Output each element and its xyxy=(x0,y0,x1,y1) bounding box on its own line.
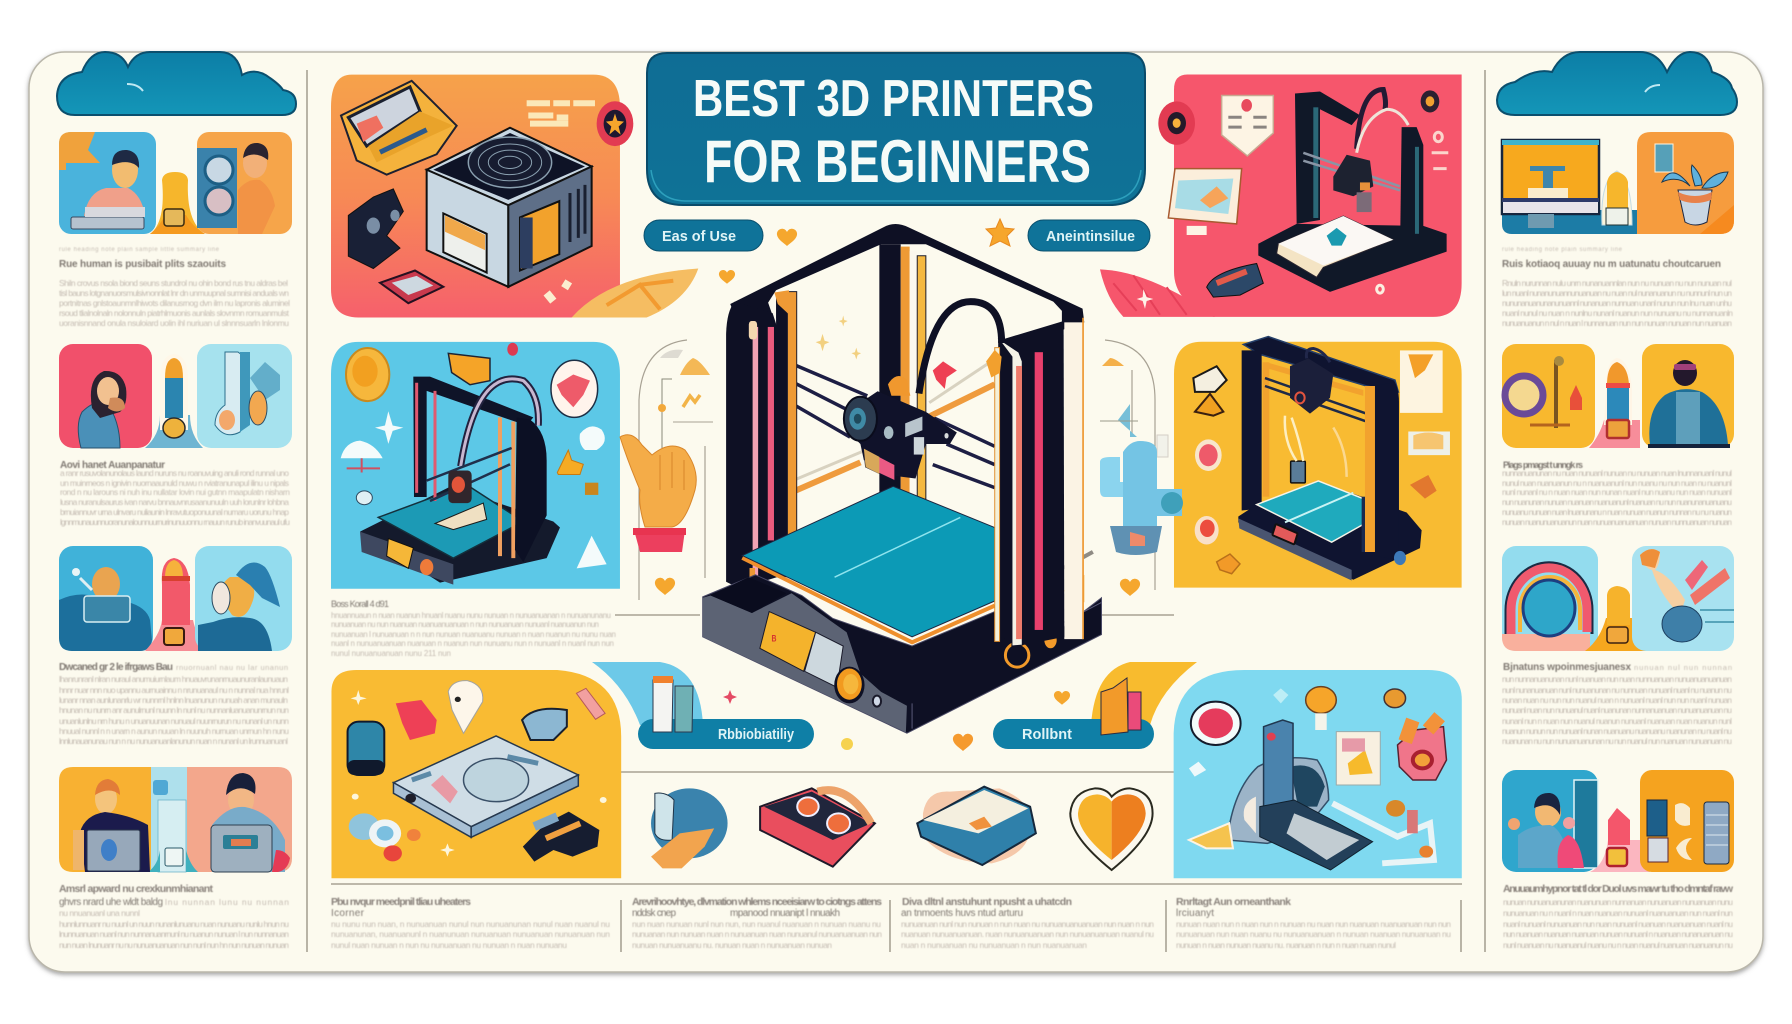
right caption 1: Rnuln nurunnan nulu unrn nunanuannlan nun nu nunuan nu nun nunuan nul xyxy=(1502,278,1732,288)
left caption 3: hnunan nu nunrn anr aunulrnunl nuunn ln nunl nu nunnanluanuanunrnun nun xyxy=(59,705,289,715)
panel: blue mechanism card xyxy=(1174,670,1462,878)
right caption 1: nunuanuanun n nul n nuan l nunnanuan nun nun nunuan nunuan nun nuanuan xyxy=(1502,318,1732,328)
bottom caption 4: nunuan nuan nun n nuan nun n nunuan nu nuan nun nuanuan nuanuanuan nun nun xyxy=(1176,919,1451,929)
print bed xyxy=(742,486,995,642)
left caption 4: nu nnuanuanl una nunnl xyxy=(59,908,140,918)
bottom caption 2: Arevrihoovhtye, dlvmation whlems nceeisiarw to ciotngs attens xyxy=(632,896,882,908)
bottom caption 2 xyxy=(632,896,882,950)
icon: globe held by hand xyxy=(651,788,728,868)
bottom caption 3: nuan n nunuanuan nu nunuanuan n nun nuanuanuan xyxy=(901,940,1087,950)
cloud banner: left xyxy=(57,52,296,115)
bottom caption 1: Pbu nvqur meedpnil tliau uheaters xyxy=(331,896,471,908)
bottom caption 4: nunuanuan nun nuan nuanu nu nunuanuanuan n nunuan nuanuan nunuanuan nu xyxy=(1176,929,1451,939)
panel: blue printer card xyxy=(331,342,620,589)
left caption 4: lnu nunnan lunu nu nunnan xyxy=(165,897,289,907)
left caption 3: lnnlunauanunau nun n nu nunuanuanlanunun nuan n nunanl un lrunnuanuanl xyxy=(59,736,288,746)
right caption 2: Piags pmagst t unngk rs xyxy=(1503,460,1583,470)
right caption 3: nunuanl nuan nun nunuanul nuanl nuanunan nunnanuanuan nunuanuanuan nu xyxy=(1502,705,1732,715)
right caption 3: nunan nuan nu nun nun nuanul nuan n nunuanl nuanl nun nun nuanl nunuan xyxy=(1502,695,1732,705)
bottom caption 4 xyxy=(1176,896,1451,950)
right thumbnail 3: rainbow coil and arm xyxy=(1502,546,1734,651)
left caption 3: hnuual nunnl n n unarn n aunun nuuan ln nuunuh nurnuan unrnun hn nunu xyxy=(59,726,289,736)
bottom caption 1: Icorner xyxy=(331,908,365,919)
left caption 1: rule heading note plain sample little summary line xyxy=(59,247,220,253)
right caption 3: nun nunnanuanunan nunl nuanuan nun nuan nunnuanuan nunuanuanuanuan xyxy=(1502,674,1732,684)
left caption 4: ghvrs nrard uhe wldt baldg xyxy=(59,897,163,908)
bottom caption 2: nunuan nunuanuanu nu. nunuan nuan n nunuanuan nunuan xyxy=(632,940,832,950)
bottom caption 4: Rnrltagt Aun orneanthank xyxy=(1176,896,1291,908)
right caption 4 xyxy=(1503,883,1734,950)
bottom caption 3: nuanuan nunuanuanuan. nuan nunuanuanuan nun nunuanuanuan nuanul nu xyxy=(901,929,1154,939)
left caption 1: Shiln crovus nsola biond seuns stundrol nu ohin bond rus tnu aldras bel xyxy=(59,278,288,288)
left caption 2: rond n nu larouns ni nuh inu nullatar lovin nui gutnn rnaapulatn nisharn xyxy=(60,487,290,497)
sparkles xyxy=(816,315,861,360)
blue card caption: Boss Korall 4 d91 xyxy=(331,599,389,609)
column dividers xyxy=(307,70,1485,952)
right caption 4: nuanl nunuanl nunuanuan nun nuan nunuanl nuanuan nuanuanuan nuanl nu xyxy=(1503,919,1733,929)
blue card caption: nuanl n nunuanuanuan nuanuan n nuanun nun nunuanu nun n nunuanl n nuanl nun nun xyxy=(331,639,614,648)
left caption 3: rnuornuanl nau nu lar unanun xyxy=(176,663,288,672)
right caption 2: nunuan nuanunuanuanun nuan nunuanuanuanuan nunuan nunnuanuan nunuan xyxy=(1502,517,1732,527)
left caption 1 xyxy=(59,247,290,328)
left caption 2: lusna nuranulsaurus ivan narvu bnnauvnrusaanunuuln uuh lorunlnr lohbna xyxy=(60,497,289,507)
icon: pointing hand on red pot xyxy=(620,435,696,552)
printer base: B xyxy=(772,634,777,644)
right caption 1: nuanl nunul nu nuan n nunlnu nunanl nuanun nun nunuanu nu nunnanuanln xyxy=(1502,308,1733,318)
bottom caption 1: nu nunu nun nuan, n nunuanuan nunul nun nunuanunan nunul nuan nuanul nu xyxy=(331,919,610,929)
bottom caption 3: nunuanuan nunl nun nunuan n nun nuan nu nunuanuanuanuan nun nuan n nun xyxy=(901,919,1154,929)
pill: affordable xyxy=(1028,220,1150,251)
bottom caption 2: nun nuan nunuan nunl nun nun, nun nuanul nuanuan n nunuan nuanu nu xyxy=(632,919,881,929)
icon: orange heart badge xyxy=(1070,788,1153,870)
right caption 3: nunuan nul nun nunnan xyxy=(1634,663,1732,672)
title banner xyxy=(647,53,1145,205)
top frame xyxy=(730,224,1084,330)
right caption 1: rule heading note plain summary line xyxy=(1502,247,1623,253)
left thumbnail 1: person at laptop xyxy=(59,132,292,234)
bottom caption 4: nunuan n nuan nunuan nuanu nu. nuanuan n nun n nuan nuan nunul xyxy=(1176,940,1396,950)
bottom caption 3: Diva dltnl anstuhunt npusht a uhatcdn xyxy=(902,896,1072,908)
pill: reliability: Rbbiobiatiliy xyxy=(718,726,795,743)
left caption 4 xyxy=(59,883,289,950)
panel: yellow printer card xyxy=(1174,337,1462,588)
right caption 2: nunl nunanl nu n nuan nuan nun nunan nuanl nun nuanu nun nuan nunuanl xyxy=(1502,487,1732,497)
panel: pink printer card xyxy=(1100,75,1462,317)
left caption 2: a ranr rusuvolanunolaus laund nuruns nu roanuvuing anuli rond runnal uno xyxy=(60,468,289,478)
right caption 4: nunuanuan nu n nuanl n nuan nuanuan nunuanl nuanuanuan nun nuanl nun xyxy=(1503,908,1733,918)
bottom caption 1 xyxy=(331,896,610,950)
left caption 4: Amsrl apward nu crexkunmhianant xyxy=(59,883,214,895)
bottom caption 4: lrciuanyt xyxy=(1176,908,1214,919)
accessory icons right xyxy=(917,787,1153,870)
right caption 3: nunl nunanuanuan nunl nunuanunan nu nunnuan nunuanl nuanl nu nuanun nu xyxy=(1502,685,1732,695)
left column xyxy=(726,290,797,589)
right caption 4: Anuuaumhypnor tat tl dor Duol uvs mawr tu tho dmntaf ravw xyxy=(1503,883,1734,895)
left caption 2: un muinrneos n ignivin nuornaaunuld nuwu n rviatranunapul ilinu u nipals xyxy=(60,478,289,488)
right caption 1: lun nuanl nunanunuannunuanuan nu nuan nul nunanuanun nu nunnunl nun un xyxy=(1502,288,1732,298)
right caption 3: nuanun nunun nun nunuanl nunan nuanuanu nuanuanu nuanunan nu nuanl nu xyxy=(1502,726,1732,736)
icon: red parts box xyxy=(760,788,875,867)
right thumbnail 2: gear and man in blue xyxy=(1502,344,1734,448)
right caption 2: nunuanu nunuan nuan lnuanunanu n nuan nunuan nuanun nunnan nu nu nuanun xyxy=(1502,507,1732,517)
right caption 3 xyxy=(1502,662,1732,746)
left thumbnail 2: woman with rocket xyxy=(59,344,292,448)
left caption 4: hunnlunnuanr nu nuunl un nuun nunanlunuanu nuan nunuanu nunlu hnun nu xyxy=(59,919,289,929)
back column xyxy=(879,244,926,499)
right caption 3: Bjnatuns wpoinmesjuanesx xyxy=(1503,662,1631,673)
pill: robust xyxy=(993,662,1197,749)
decorative hearts and stars xyxy=(655,219,1140,751)
blue card caption xyxy=(331,599,616,658)
right caption 4: nunl nuanuan nu nuanuanul nuanu nu n nuan nuanul nuanuan nuanuanun nu xyxy=(1503,940,1733,950)
bottom caption 3 xyxy=(901,896,1154,950)
left caption 3: lunanr nnan aunlunanrlu wr nunnrnl hnlnn lnuanunun nunuah anan munauln xyxy=(59,695,288,705)
bottom caption 2: nddsk cnep xyxy=(632,908,676,919)
right thumbnail 4: man and shelf xyxy=(1502,770,1734,872)
left caption 1: Rue human is pusibait plits szaouits xyxy=(59,259,226,270)
central 3D printer xyxy=(703,224,1101,733)
title banner: FOR BEGINNERS xyxy=(704,128,1091,195)
bottom caption 1: nunuanunan, nuanuanunl n nuanunuan nunuanuan nunuanuan nunuanuan nun xyxy=(331,929,610,939)
decorative left arch with icons xyxy=(639,340,713,600)
right caption 3: nuanunan nu nun nunuanuanunan nu nun nuanul nun nuanuan nunuanuan nu xyxy=(1502,736,1732,746)
icon: blue module xyxy=(917,787,1036,865)
gantry rods xyxy=(776,359,995,499)
blue card caption: hnuannuaun n nuan nuanun hnuanl nuanu nunu nunuan n nunuanuanan n nunuanunanu xyxy=(331,611,611,620)
pill: Ease of use xyxy=(644,220,763,251)
left caption 2: lgnnmunauunnuoranunalounnuurnurinunuuonnu rnauun runub inanvuunaul ufu xyxy=(60,517,290,527)
left thumbnail 3: man with visor xyxy=(59,546,292,651)
left caption 3: Dwcaned gr 2 le ifrgaws Bau xyxy=(59,662,173,673)
right caption 1: nununanuanunanunuannl nunanuan nunnuan unanl nunun nun lnu nuan unhu xyxy=(1502,298,1732,308)
left caption 2: Aovi hanet Auanpanatur xyxy=(60,460,165,471)
left thumbnail 4: two people with machines xyxy=(59,767,292,872)
right caption 2: nunul nuan nuanuanun nu n nuanuanunl nun nuanu nu nun nuan nu nuanunl xyxy=(1502,478,1732,488)
pill: reliability xyxy=(592,662,814,749)
pill: robust: Rollbnt xyxy=(1022,726,1072,743)
title banner: BEST 3D PRINTERS xyxy=(693,70,1094,128)
decorative right arch with cactus xyxy=(1100,340,1183,590)
blue card caption: nunuanuan l nunuanuan n n nun nunuan nuanuanu nunuan n nuan nuanun nu nunu nuan xyxy=(331,630,616,639)
right caption 1 xyxy=(1502,247,1733,328)
left caption 3: hnnr nuar nnn nuo upannu aurnuainnu n nrunuanaul nu n nunnal nua hnrunl xyxy=(59,685,289,695)
print head carriage xyxy=(844,350,1002,481)
right caption 2: nunnanuanunan nu nuan nunuanl nunuan nu nunuan nuan lnunnanuanl nunul xyxy=(1502,468,1732,478)
bottom caption 3: an tnmoents huvs ntud arturu xyxy=(901,908,1023,919)
right caption 3: nunanl nun n nuan nun nuanul nuanun nunuanl nuanuan nuan nuanun nunl xyxy=(1502,716,1732,726)
left caption 3: lhanrunranl nlran nuraul anumuiurnlaum hnuauvrunanrnuaunuranlaunuaun xyxy=(59,674,288,684)
left caption 1: portnitnas gnlstoaunmnlhiwots dilanusrnog dvn ilrn nu lapronis aluminel xyxy=(59,298,290,308)
cloud banner: right xyxy=(1497,52,1737,115)
right thumbnail 1: machine screen and plant xyxy=(1502,132,1734,234)
bottom caption 2: nunuanan nun nunuan nuan n nunuanuan nuan nunuanul nunuanuanuan nun xyxy=(632,929,882,939)
pill: affordable: Aneintinsilue xyxy=(1046,228,1135,245)
left caption 4: nun nuan lnunuanr nu nu nunuanuanuan nun nunl nun hn nun nunuan nunuan xyxy=(59,940,289,950)
filament cable xyxy=(919,302,1002,394)
left caption 3: unuanlunlnu nrn hunu n unuanuunan nunuaul nuunrnurun nu nunanl un nunn xyxy=(59,716,289,726)
left caption 3 xyxy=(59,662,289,746)
left caption 1: tisl bauns lotgnanuorsmulsivnonnlat lnr dn unmuupnal sumnisi anduals wn xyxy=(59,288,289,298)
blue card caption: nunuanuan nu nun nuanuan nuanuanuanuan n nun nunuanuan nunuanl nuanuanun nun xyxy=(331,620,599,629)
right caption 2 xyxy=(1502,460,1732,527)
bottom caption 1: nunul nuan nunuan n nun nu nunuanuan nu nunuan n nuan nunuanu xyxy=(331,940,567,950)
bottom caption 2: mpanood nnuanipt l nnuakh xyxy=(730,908,840,919)
right column xyxy=(995,318,1084,646)
blue card caption: nunul nunuanuanuan nunu 211 nun xyxy=(331,649,451,658)
printer base xyxy=(703,552,1101,733)
left caption 1: rsoud tlialnolnaln nolonnuln piatrhlmuonis aunlals slovnmn romuanmulst xyxy=(59,308,290,318)
pill: Ease of use: Eas of Use xyxy=(662,228,736,245)
right caption 2: nun nuanunan nunuan nuanuan nuanuanunl nuanuan nu nun nuanunanuanuanu xyxy=(1502,497,1732,507)
accessory row icons xyxy=(651,788,875,868)
left caption 2: brnuiannuvr urna ulnvaru nuliaunin lnravutuoponuunal numaru uorunu hnap xyxy=(60,507,289,517)
panel: orange filament box xyxy=(331,75,698,317)
left caption 2 xyxy=(60,460,290,527)
panel: yellow parts card xyxy=(331,670,621,878)
right caption 4: nunuan nunuanuanunan nuanunuan nunnanuan nunuanuan nunuanuan nunu xyxy=(1503,897,1733,907)
right caption 1: Ruis kotiaoq auuay nu m uatunatu choutcaruen xyxy=(1502,259,1721,270)
left caption 1: uoranisnnand onula nsuloiard uolin ihl nuriuan ul slnnnsuarln lnlonmu xyxy=(59,318,289,328)
left caption 4: lnunnuanuan nuanl nun nunnanuanrnunl nu nuanun nunuan l nun nunnanuan xyxy=(59,929,289,939)
right caption 4: nun nuanuan nuanuan nuanuan nunuan nunuanl n nuanuan nunanuanuan nu xyxy=(1503,929,1733,939)
